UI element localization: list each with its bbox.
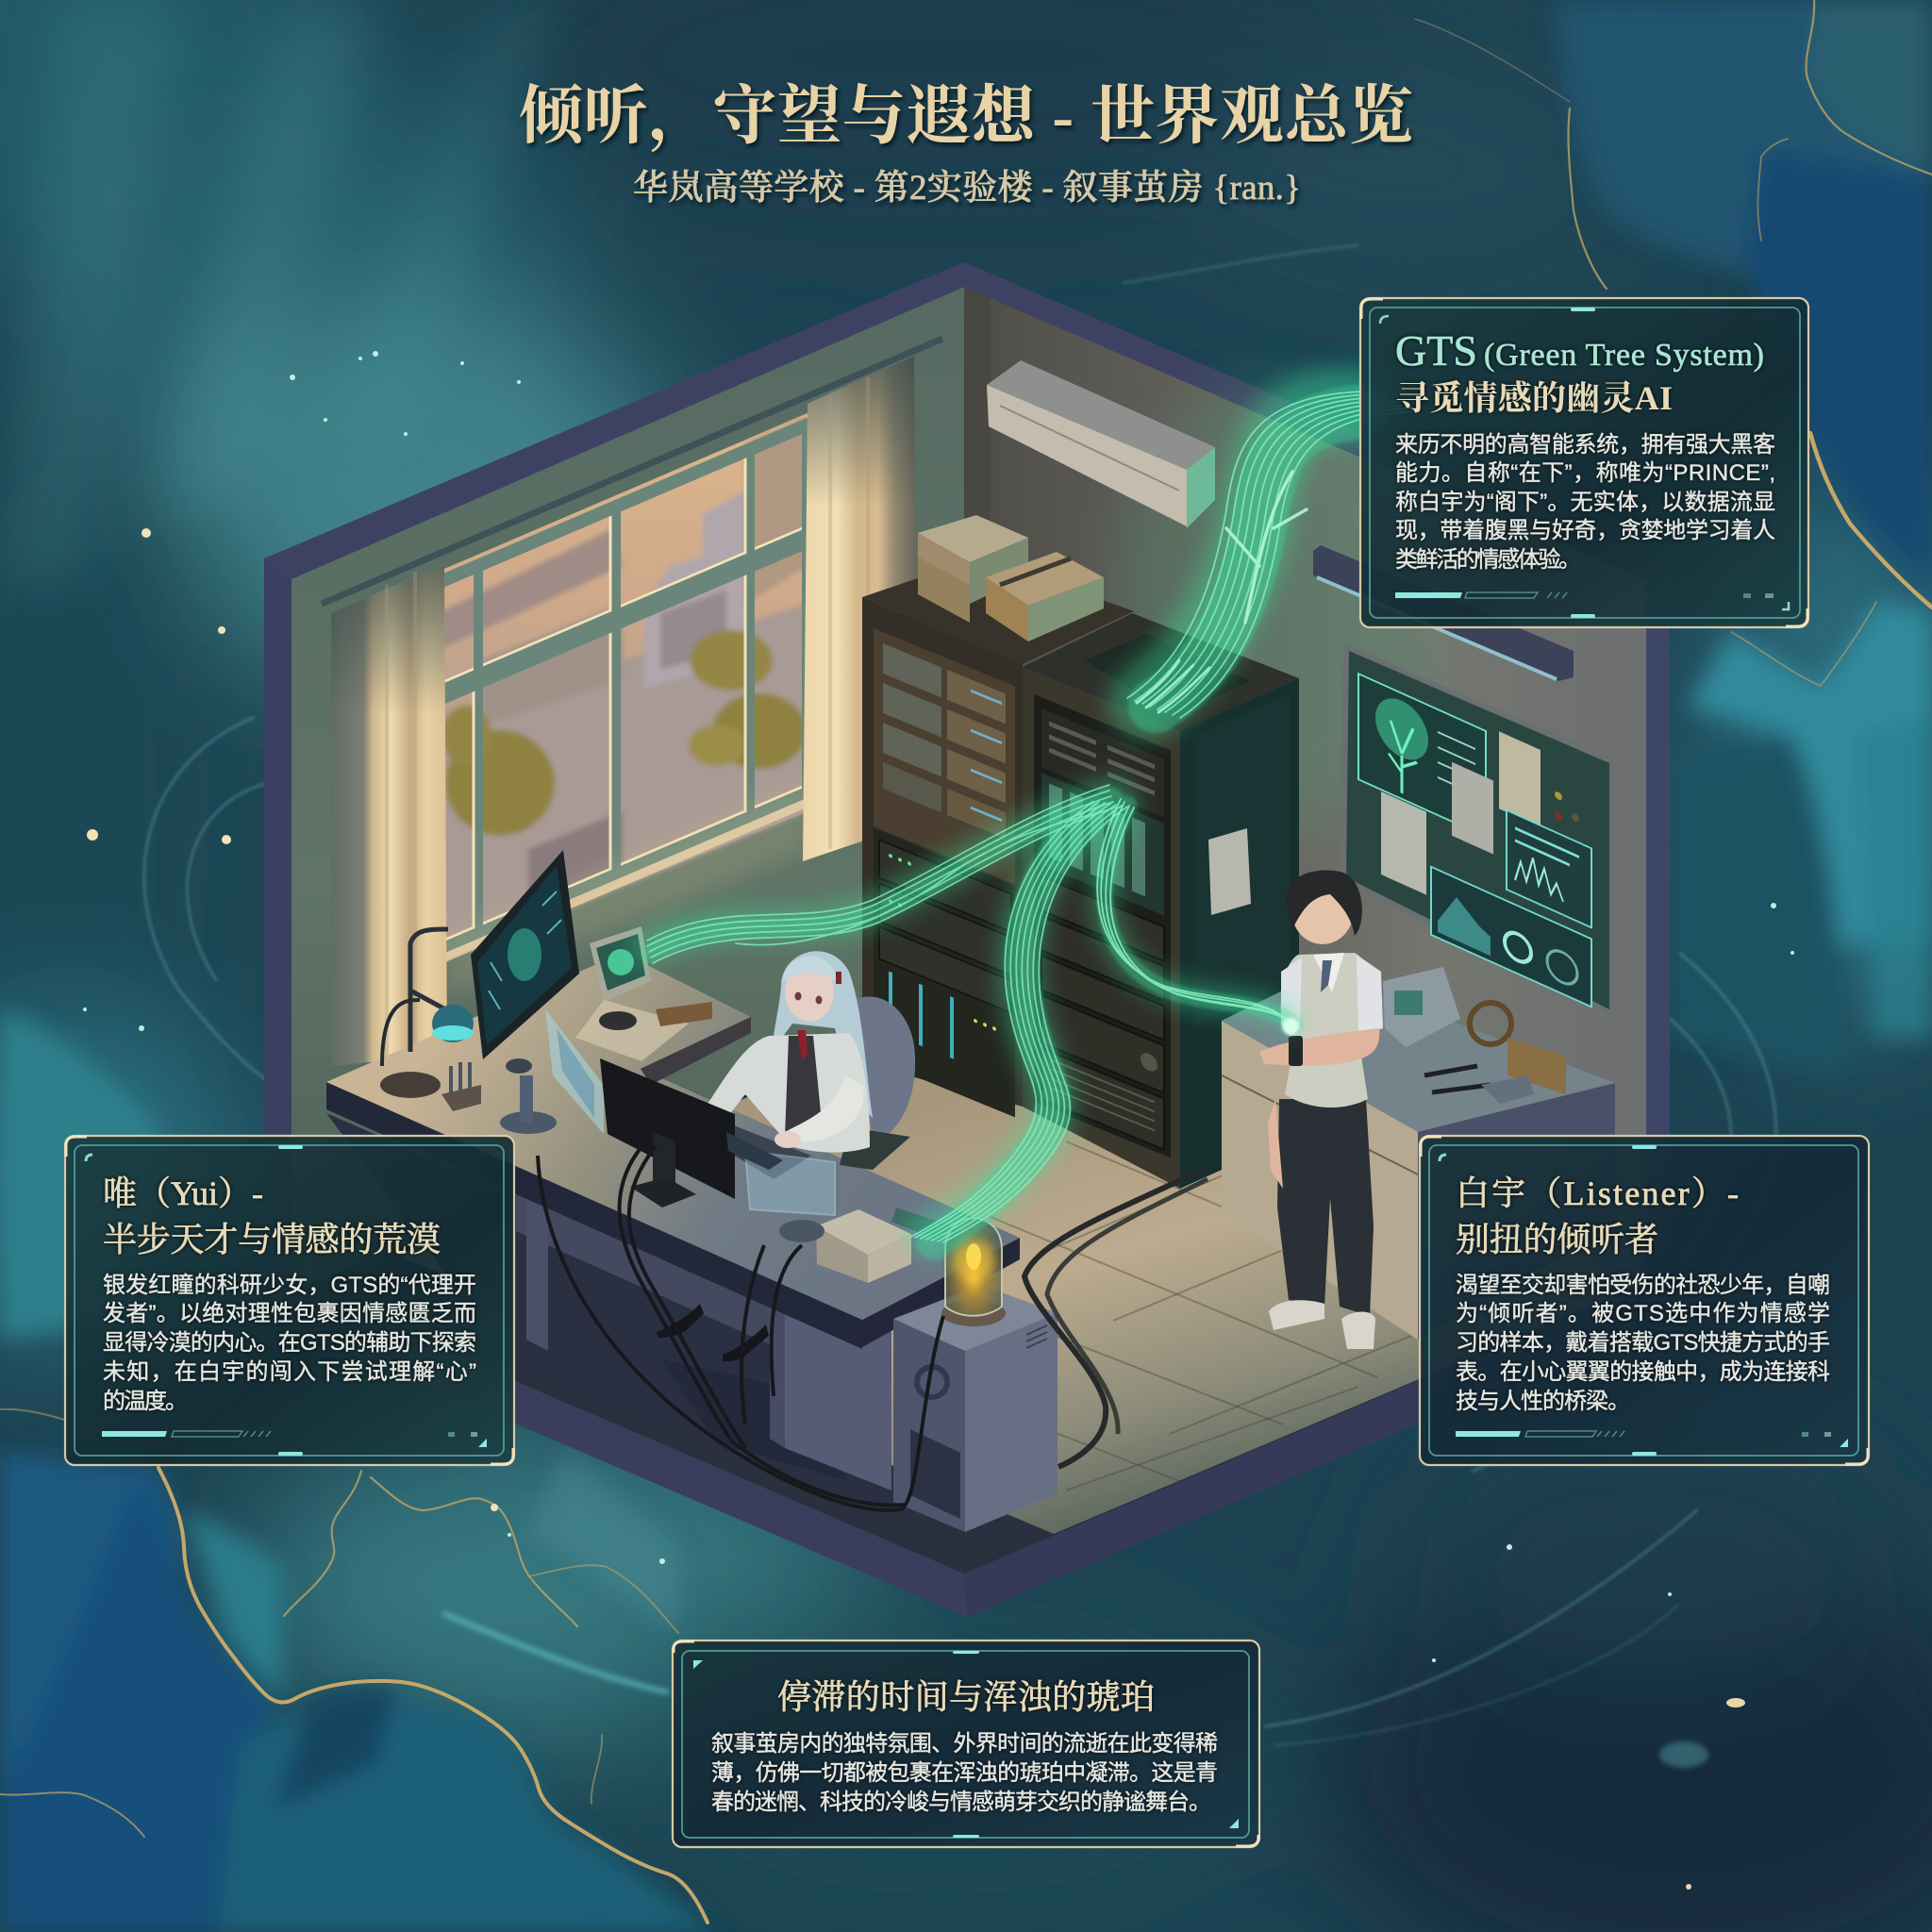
heading: Yui subtitle: 半步天才与情感的荒漠 — [103, 1221, 441, 1258]
office chair — [840, 996, 915, 1170]
air conditioner — [987, 360, 1215, 528]
boy: Bai Yu — [1259, 871, 1383, 1349]
amber time description: 叙事茧房内的独特氛围、外界时间的流逝在此变得稀 — [711, 1731, 1218, 1757]
Listener description — [1456, 1273, 1830, 1414]
bench devices — [1383, 967, 1566, 1104]
stream: desk to rack fibres — [647, 785, 1115, 963]
wisps — [144, 245, 1776, 1745]
board paper notes — [1381, 678, 1541, 946]
floor cables — [538, 1142, 1208, 1510]
holographic display on desk — [726, 1132, 835, 1215]
window — [415, 413, 811, 1000]
panel: Yui — [65, 1136, 514, 1465]
GTS description: 来历不明的高智能系统，拥有强大黑客 — [1395, 432, 1775, 458]
heading: Listener subtitle: 别扭的倾听者 — [1456, 1221, 1658, 1258]
main desk monitor — [600, 1058, 735, 1208]
status bar — [102, 1431, 477, 1437]
amber time description — [711, 1731, 1218, 1815]
Yui description: 显得冷漠的内心。在GTS的辅助下探索 — [103, 1330, 476, 1356]
ceiling light bar — [1313, 545, 1574, 681]
light rays — [0, 0, 557, 585]
lab cabinet — [1222, 967, 1615, 1340]
heading: Listener name: 白宇（Listener）- — [1456, 1174, 1739, 1212]
small core monitor — [590, 926, 651, 1002]
stream: rack to wrist fibres — [1097, 799, 1300, 1028]
title: 倾听，守望与遐想 - 世界观总览 — [519, 80, 1413, 153]
GTS description — [1395, 432, 1775, 573]
heading: GTS name: (Green Tree System) — [1484, 338, 1764, 373]
Listener description: 习的样本，戴着搭载GTS快捷方式的手 — [1456, 1330, 1830, 1356]
GTS description: 现，带着腹黑与好奇，贪婪地学习着人 — [1395, 518, 1775, 543]
left desk — [326, 953, 1020, 1491]
board screen: tree — [1358, 674, 1486, 837]
room shell: walls and floor slab — [264, 262, 1670, 1617]
Yui description: 的温度。 — [103, 1389, 188, 1414]
Listener description: 技与人性的桥梁。 — [1456, 1389, 1630, 1414]
Listener description: 为“倾听者”。被GTS选中作为情感学 — [1456, 1301, 1830, 1326]
status bar — [1395, 592, 1774, 598]
holographic panel left — [545, 1009, 604, 1134]
stream: GTS ribbon fibres — [1127, 391, 1416, 718]
board chart — [1507, 810, 1591, 927]
Yui description: 发者”。以绝对理性包裹因情感匮乏而 — [103, 1301, 476, 1326]
curtains — [322, 339, 942, 1066]
Listener description: 渴望至交却害怕受伤的社恐少年，自嘲 — [1456, 1273, 1830, 1298]
heading: GTS subtitle: 寻觅情感的幽灵AI — [1395, 379, 1673, 417]
girl: Yui — [657, 951, 915, 1361]
Listener description: 表。在小心翼翼的接触中，成为连接科 — [1456, 1359, 1830, 1385]
panel: GTS — [1360, 298, 1808, 627]
stream: soft glow — [647, 406, 1363, 1236]
heading: Yui name: 唯（Yui）- — [103, 1174, 263, 1212]
data streams: green light — [647, 391, 1416, 1243]
server rack main — [1023, 613, 1299, 1189]
heading: GTS name: GTS — [1395, 326, 1477, 375]
wall board — [1341, 642, 1615, 1018]
floor tiles — [326, 1000, 1646, 1534]
GTS description: 类鲜活的情感体验。 — [1395, 547, 1581, 573]
big monitor — [471, 850, 579, 1059]
desk equipment box — [779, 1208, 953, 1283]
desk lamp — [380, 929, 474, 1098]
GTS description: 称白宇为“阁下”。无实体，以数据流显 — [1395, 490, 1775, 515]
high heels under desk — [657, 1304, 769, 1361]
status bar — [1456, 1431, 1831, 1437]
board dashboard — [1431, 867, 1591, 1007]
PC tower — [893, 1285, 1058, 1532]
panel: Listener — [1420, 1136, 1869, 1465]
stream: rack to floor fibres — [909, 802, 1127, 1242]
desk props: pens, microscope, papers — [441, 1000, 811, 1179]
glass amber lamp — [941, 1218, 1006, 1326]
panel: amber time — [673, 1641, 1259, 1847]
subtitle: 华岚高等学校 - 第2实验楼 - 叙事茧房 {ran.} — [633, 168, 1301, 208]
storage boxes — [918, 515, 1104, 641]
isometric room — [264, 262, 1670, 1617]
amber time description: 薄，仿佛一切都被包裹在浑浊的琥珀中凝滞。这是青 — [711, 1760, 1218, 1786]
GTS description: 能力。自称“在下”，称唯为“PRINCE”, — [1395, 460, 1775, 486]
stream: translucent ribbon body — [651, 411, 1363, 1243]
Yui description — [103, 1273, 476, 1414]
particles — [83, 351, 1794, 1890]
amber time description: 春的迷惘、科技的冷峻与情感萌芽交织的静谧舞台。 — [711, 1790, 1211, 1815]
Yui description: 未知，在白宇的闯入下尝试理解“心” — [103, 1359, 476, 1385]
heading: amber time: 停滞的时间与浑浊的琥珀 — [777, 1678, 1155, 1716]
server rack left — [862, 557, 1134, 1117]
Yui description: 银发红瞳的科研少女，GTS的“代理开 — [103, 1273, 476, 1298]
